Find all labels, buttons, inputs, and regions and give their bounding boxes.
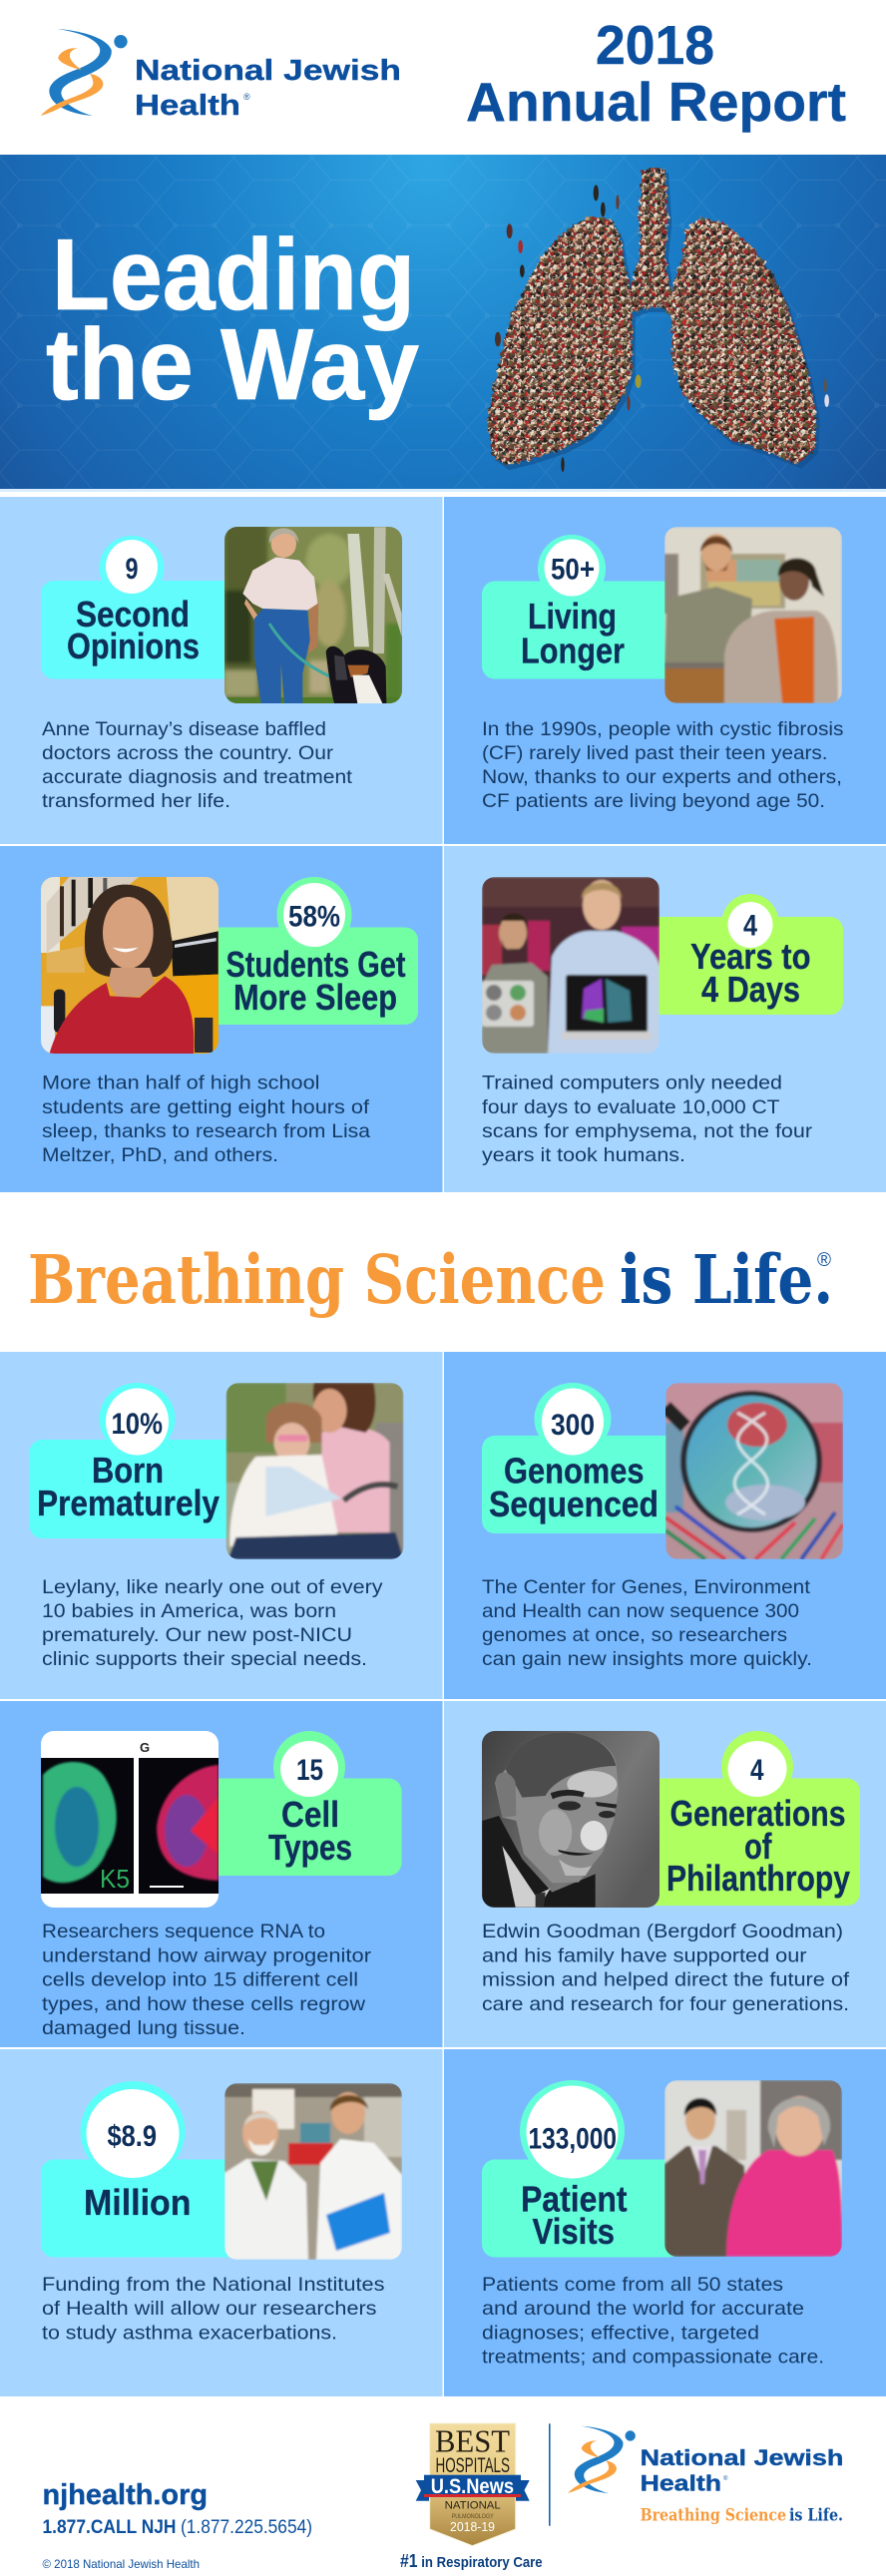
hero heading: the Way [46,309,419,421]
label: $8.9 Million: Million [84,2182,192,2223]
footer contact details: 1.877.CALL NJH [42,2517,176,2538]
label: 10% Born Prematurely: Prematurely [37,1483,221,1523]
panel: 4 generations of philanthropy [444,1701,886,2047]
body text [482,1576,812,1670]
panel: 58% students get more sleep [0,846,443,1192]
label: 4 Years to 4 Days: 4 Days [701,969,800,1010]
label: 300 Genomes Sequenced [482,1383,681,1533]
footer wordmark: National Jewish [641,2445,843,2470]
label: 50+ Living Longer: Longer [521,631,625,670]
body text [482,1921,850,2015]
title: 2018 Annual Report [466,14,846,133]
footer wordmark: Health [641,2471,721,2496]
footer tagline: is Life. [789,2506,843,2526]
panel: 133,000 patient visits [444,2049,886,2396]
body text: damaged lung tissue. [42,2017,245,2039]
label: 300 Genomes Sequenced: 300 [551,1409,595,1442]
hero heading: Leading [52,219,415,331]
footer wordmark: ® [723,2475,728,2482]
body text: treatments; and compassionate care. [482,2347,824,2368]
body text: Anne Tournay’s disease baffled [42,718,326,740]
label: 133,000 Patient Visits: 133,000 [529,2123,617,2155]
logo wordmark: Health [135,90,240,122]
footer contact details: © 2018 National Jewish Health [42,2557,200,2571]
body text: (CF) rarely lived past their teen years. [482,742,828,764]
panel: 4 years to 4 days [444,846,886,1192]
label: 4 Generations of Philanthropy [644,1731,860,1906]
body text: and his family have supported our [482,1945,807,1967]
label: 133,000 Patient Visits [482,2080,681,2257]
body text: sleep, thanks to research from Lisa [42,1120,370,1142]
footer contact details: (1.877.225.5654) [181,2517,312,2538]
label: 300 Genomes Sequenced: Genomes [504,1451,645,1491]
label: 133,000 Patient Visits: Patient [521,2179,627,2219]
label: 9 Second Opinions: Second [76,594,190,635]
title: 2018 Annual Report: 2018 [596,14,714,76]
footer wordmark [641,2445,843,2496]
label: 15 Cell Types: Cell [281,1794,339,1835]
photo: Edwin Goodman portrait [479,1726,665,1913]
body text: types, and how these cells regrow [42,1993,366,2015]
micrograph: airway progenitor cells [41,1731,219,1908]
panel: 50+ living longer [444,497,886,844]
photo: woman walking a dog [224,527,402,703]
body text: and Health can now sequence 300 [482,1600,799,1622]
logo wordmark [135,55,401,122]
label: 50+ Living Longer [482,535,681,678]
body text: of Health will allow our researchers [42,2298,377,2320]
body text: Leylany, like nearly one out of every [42,1576,383,1598]
label: 4 Years to 4 Days: 4 [743,910,757,942]
label: 4 Years to 4 Days [644,894,843,1015]
label: 9 Second Opinions [41,536,240,678]
body text: years it took humans. [482,1144,685,1166]
body text: transformed her life. [42,790,230,812]
body text [42,1072,370,1166]
body text [42,2274,385,2345]
body text: Meltzer, PhD, and others. [42,1144,278,1166]
body text [482,1072,813,1166]
label: 133,000 Patient Visits: Visits [533,2211,615,2252]
label: $8.9 Million: $8.9 [108,2120,157,2153]
label: 58% Students Get More Sleep: More Sleep [233,977,397,1018]
body text: In the 1990s, people with cystic fibrosis [482,718,844,740]
body text [482,718,844,812]
hero heading [46,219,419,421]
panel: 10% born prematurely [0,1352,443,1699]
body text [42,718,353,812]
badge: US News Best Hospitals: NATIONAL [445,2499,501,2511]
footer logo: National Jewish Health [568,2426,843,2526]
label: 58% Students Get More Sleep [205,877,418,1025]
logo wordmark: ® [243,92,250,102]
title: 2018 Annual Report: Annual Report [466,71,846,133]
photo: Lisa Meltzer by a school bus [40,873,226,1060]
body text [482,2274,824,2368]
photo: mother reading to daughter [225,1383,403,1559]
label: 58% Students Get More Sleep: 58% [288,900,340,934]
label: 9 Second Opinions: 9 [126,553,138,586]
body text: to study asthma exacerbations. [42,2323,337,2345]
icon: helix logo [41,29,128,116]
panel: 9 second opinions [0,497,443,844]
label: 15 Cell Types: 15 [296,1754,323,1787]
badge: US News Best Hospitals: 2018-19 [450,2519,495,2534]
label: 10% Born Prematurely: 10% [112,1408,163,1441]
heading: Breathing Science is Life: is Life. [620,1240,833,1319]
label: 58% Students Get More Sleep: Students Get [225,944,405,985]
badge: US News Best Hospitals: PULMONOLOGY [452,2513,494,2520]
panel: 300 genomes sequenced [444,1352,886,1699]
body text: CF patients are living beyond age 50. [482,790,825,812]
heading: Breathing Science is Life: Breathing Science [28,1240,606,1319]
badge: US News Best Hospitals [416,2422,530,2546]
body text: students are getting eight hours of [42,1096,370,1118]
body text: care and research for four generations. [482,1993,849,2015]
label: 9 Second Opinions: Opinions [67,626,200,666]
body text: Edwin Goodman (Bergdorf Goodman) [482,1921,843,1942]
body text: four days to evaluate 10,000 CT [482,1096,780,1118]
body text: prematurely. Our new post-NICU [42,1624,352,1646]
body text: Researchers sequence RNA to [42,1921,325,1942]
body text: clinic supports their special needs. [42,1648,367,1670]
body text [42,1921,372,2039]
photo: man and female doctor [664,527,842,703]
photo: researchers with laptops showing lung scans [482,877,660,1054]
body text: Patients come from all 50 states [482,2274,783,2296]
stain label: K5 [100,1864,130,1894]
body text: mission and helped direct the future of [482,1969,850,1991]
label: $8.9 Million [41,2081,240,2257]
label: 10% Born Prematurely: Born [92,1450,164,1491]
photo: magnifying glass over DNA [665,1383,843,1559]
photo: two doctors in a lab [224,2083,402,2260]
badge: US News Best Hospitals: U.S.News [431,2475,514,2498]
label: 4 Years to 4 Days: Years to [690,936,810,977]
label: 50+ Living Longer: Living [528,596,617,637]
body text: Now, thanks to our experts and others, [482,766,842,788]
body text: scans for emphysema, not the four [482,1120,813,1142]
label: 4 Generations of Philanthropy: 4 [750,1754,764,1787]
logo wordmark: National Jewish [135,55,401,87]
label: 300 Genomes Sequenced: Sequenced [489,1484,659,1524]
caption: #1 in Respiratory Care: #1 in Respiratory Care [400,2551,543,2571]
body text: cells develop into 15 different cell [42,1969,358,1991]
panel: $8.9 million [0,2049,443,2396]
body text: The Center for Genes, Environment [482,1576,811,1598]
hero banner: Leading the Way [0,155,886,492]
label: 10% Born Prematurely [30,1383,241,1538]
body text: doctors across the country. Our [42,742,334,764]
body text: Funding from the National Institutes [42,2274,385,2296]
photo: doctor and patient [664,2080,842,2257]
badge: US News Best Hospitals: BEST [435,2422,510,2458]
footer contact details: njhealth.org [42,2479,208,2511]
label: 4 Generations of Philanthropy: of [744,1826,772,1867]
body text: diagnoses; effective, targeted [482,2323,759,2345]
body text: 10 babies in America, was born [42,1600,336,1622]
body text: Trained computers only needed [482,1072,782,1093]
heading: Breathing Science is Life: ® [817,1250,831,1271]
icon: helix logo [568,2426,636,2493]
body text: understand how airway progenitor [42,1945,372,1967]
footer contact details [42,2479,312,2571]
illustration: lungs formed by a crowd of people [487,168,829,472]
body text: genomes at once, so researchers [482,1624,787,1646]
body text: accurate diagnosis and treatment [42,766,353,788]
body text: and around the world for accurate [482,2298,804,2320]
footer tagline: Breathing Science [641,2506,786,2526]
body text: More than half of high school [42,1072,319,1093]
label: 15 Cell Types: Types [268,1827,352,1868]
label: 50+ Living Longer: 50+ [551,553,595,587]
badge: US News Best Hospitals: HOSPITALS [435,2454,510,2477]
panel: 15 cell types [0,1701,443,2047]
label: 4 Generations of Philanthropy: Philanthropy [666,1858,851,1899]
body text: can gain new insights more quickly. [482,1648,812,1670]
body text [42,1576,383,1670]
label: 15 Cell Types [205,1731,401,1876]
header logo: National Jewish Health [41,29,401,122]
label: 4 Generations of Philanthropy: Generations [670,1793,846,1834]
panel letter: G [140,1740,150,1755]
